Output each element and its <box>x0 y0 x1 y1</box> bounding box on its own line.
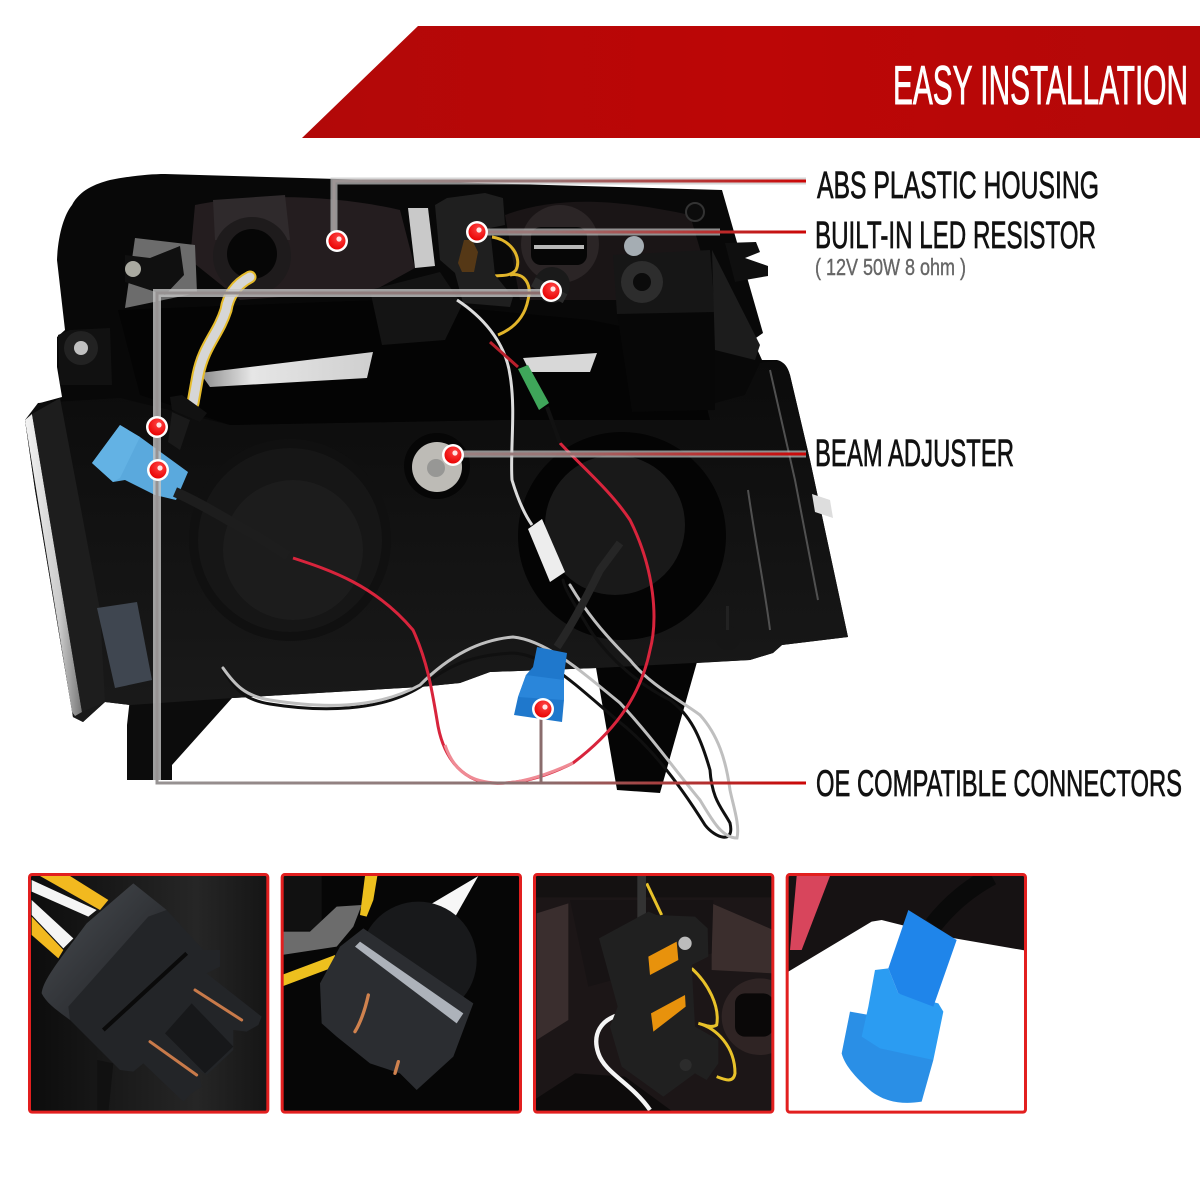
gray sensor panel <box>97 602 152 688</box>
right rim highlight <box>748 370 818 630</box>
dot: blue connector left <box>147 459 169 481</box>
right diagonal wall <box>712 250 760 360</box>
dot: housing <box>326 230 348 252</box>
callout leader lines <box>157 181 806 783</box>
leader: ABS housing <box>334 181 806 240</box>
leader: connectors frame halo <box>157 293 548 780</box>
frame <box>787 874 1025 1112</box>
dot: beam adjuster <box>442 444 464 466</box>
chrome reflector centre <box>523 353 597 372</box>
white connector <box>528 519 565 582</box>
left socket <box>213 195 291 295</box>
left lower mount with hole <box>58 328 112 385</box>
lamp silhouette <box>25 174 848 722</box>
gray wire pair lower left <box>223 580 738 838</box>
top right mount hole <box>686 203 704 221</box>
dot: resistor <box>466 221 488 243</box>
centre ribs <box>617 310 715 412</box>
frame <box>534 874 773 1112</box>
dot: blue connector bottom <box>532 698 554 720</box>
resistor box <box>435 193 513 307</box>
red wire <box>293 443 654 783</box>
right socket <box>521 205 599 283</box>
right mounting leg <box>595 662 697 793</box>
leader: resistor halo <box>477 228 720 236</box>
callout dots <box>146 221 562 720</box>
left mounting leg <box>127 698 232 780</box>
leader: resistor <box>477 230 806 234</box>
right housing area <box>505 202 715 300</box>
red wire to green tube <box>490 342 518 367</box>
right bulb plug <box>528 261 576 309</box>
left dome <box>189 439 391 641</box>
orange resistor fins <box>458 240 478 272</box>
clear tab <box>812 494 833 518</box>
red wire lower fade <box>445 745 573 783</box>
banner <box>302 26 1200 138</box>
screw <box>125 261 141 277</box>
connector base <box>842 1012 933 1103</box>
green tube <box>518 365 549 410</box>
leader: connectors frame <box>157 293 806 783</box>
small black bulb plug <box>168 395 207 450</box>
leader: ABS housing halo <box>334 181 806 240</box>
resistor yellow loop <box>492 237 529 335</box>
thumbnail: bulb plug side <box>282 874 521 1113</box>
thumbnail: bulb plug angled <box>29 874 268 1113</box>
leader: connectors drop <box>540 712 542 783</box>
connector neck <box>888 910 957 1007</box>
black cable right <box>557 543 620 647</box>
centre black block <box>370 272 462 345</box>
upper cavity shadow <box>118 300 710 425</box>
white-black wire upper <box>457 300 532 525</box>
dark lens edge <box>32 398 105 712</box>
leader: beam adjuster <box>453 452 806 456</box>
blue connector bottom <box>514 647 567 722</box>
beam adjuster disc <box>404 433 470 499</box>
lower housing <box>25 361 848 722</box>
label: beam adjuster: BEAM ADJUSTER <box>815 433 1014 475</box>
black cable left <box>175 492 288 556</box>
left clip <box>125 246 184 295</box>
dot: plug right <box>540 280 562 302</box>
thumbnail: blue connector <box>787 874 1026 1113</box>
indicator dot <box>624 236 644 256</box>
brown housing area <box>190 197 415 300</box>
right dome <box>518 432 726 640</box>
blue connector left <box>92 425 188 500</box>
small knob <box>716 606 740 650</box>
headlamp rear view photo <box>25 174 848 838</box>
dot: plug left <box>146 416 168 438</box>
frame <box>282 874 520 1112</box>
label: resistor spec: ( 12V 50W 8 ohm ) <box>815 254 966 280</box>
thumbnail: resistor <box>534 874 798 1113</box>
yellow-white wire bundle <box>193 277 250 403</box>
white window <box>408 208 435 268</box>
right side bracket <box>725 242 768 282</box>
black wire to green tube <box>547 407 560 443</box>
clear lens strip <box>25 414 82 716</box>
chrome reflector left <box>200 352 373 387</box>
right square plate <box>613 250 715 314</box>
chrome reflector right <box>665 340 692 362</box>
frame <box>29 874 268 1112</box>
left gray plate <box>125 238 197 308</box>
leader: beam adjuster halo <box>453 450 806 458</box>
connector collar <box>862 968 943 1060</box>
